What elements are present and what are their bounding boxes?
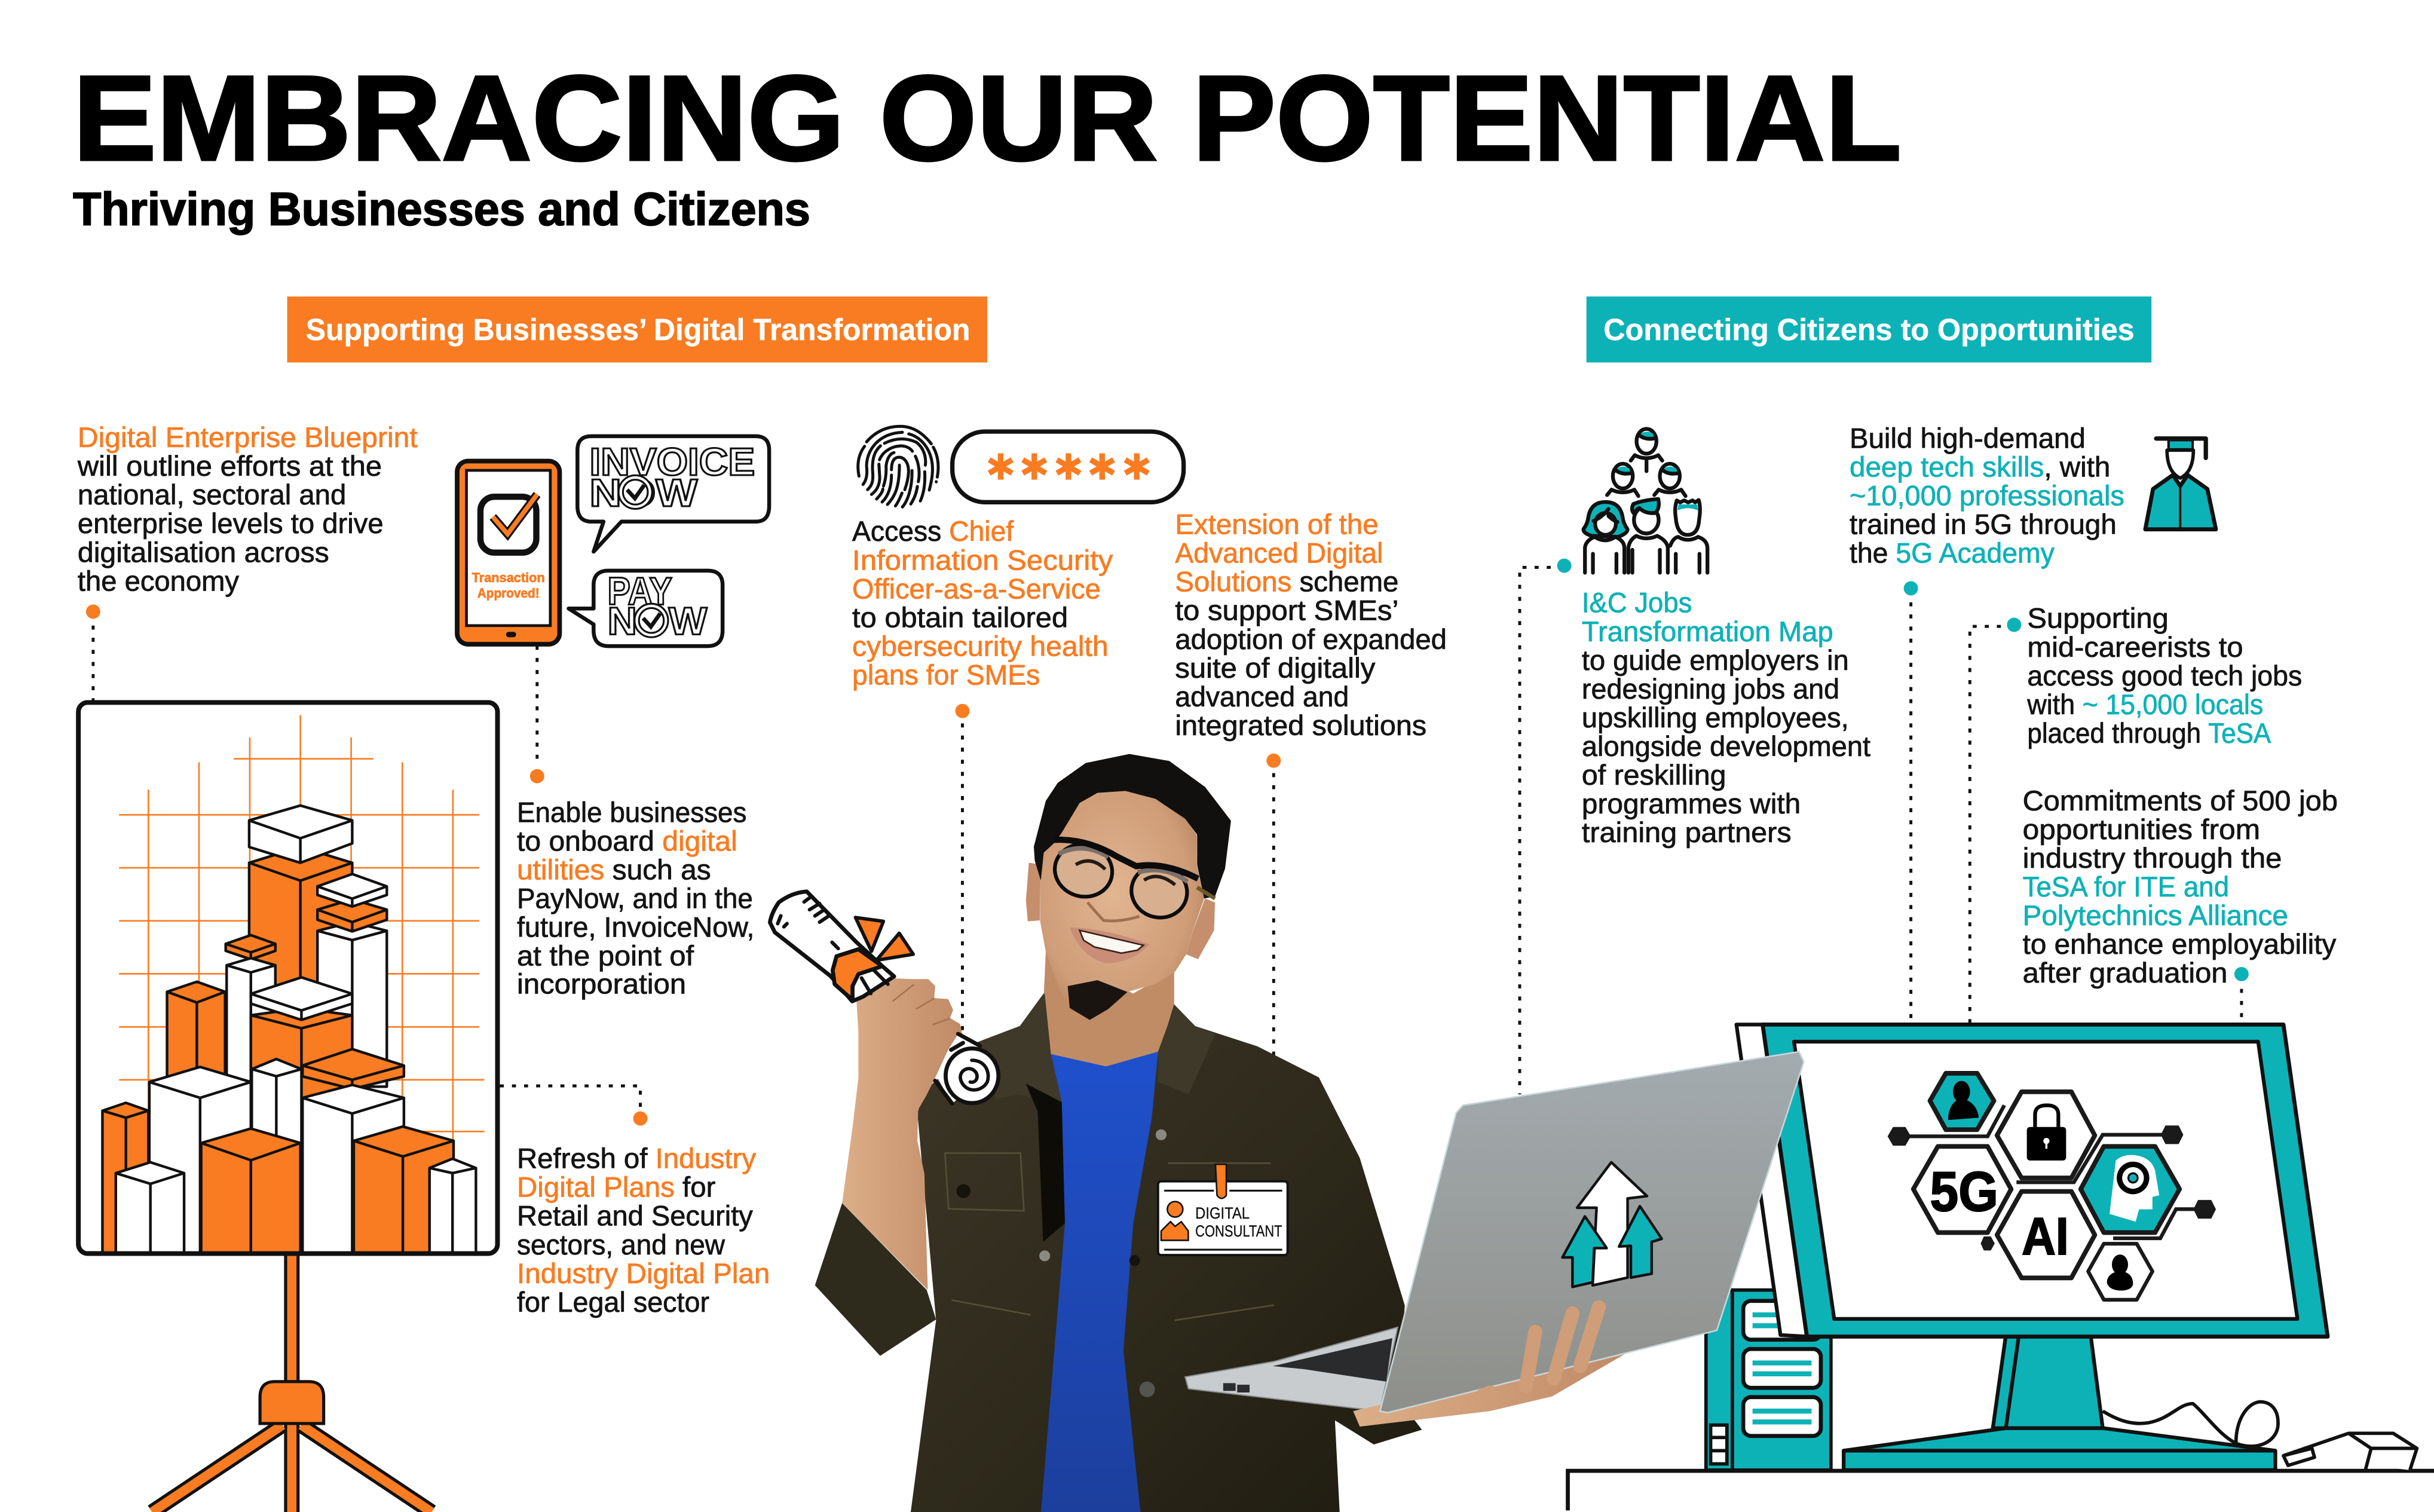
nodes <box>1888 1125 2216 1250</box>
text: advanced digital solutions: Advanced Digital <box>1175 538 1383 570</box>
text: advanced digital solutions: adoption of expanded <box>1175 624 1447 656</box>
laptop arrows logo <box>1562 1162 1662 1287</box>
text: advanced digital solutions: to support SMEs’ <box>1175 595 1398 627</box>
connector: jobs map <box>1520 559 1572 1094</box>
icon: cable and plug <box>2103 1402 2417 1470</box>
easel tripod <box>152 1254 431 1512</box>
text: digital utilities: incorporation <box>517 968 686 1000</box>
text: deep tech skills: deep tech skills, with <box>1850 451 2110 483</box>
text: deep tech skills: ~10,000 professionals <box>1850 480 2124 512</box>
icon: invoice now speech bubble: NOW <box>590 471 698 515</box>
AI hexagon: AI <box>2022 1207 2069 1266</box>
text: jobs transformation map: to guide employers in <box>1582 645 1849 677</box>
icon: monitor stand <box>1844 1335 2276 1470</box>
photo: man in jacket with laptop <box>770 754 1804 1512</box>
text: chief information security officer: cybersecurity health <box>852 630 1109 662</box>
title: EMBRACING OUR POTENTIAL <box>73 51 1902 186</box>
icon: paynow speech bubble: PAY <box>608 569 672 613</box>
text: digital enterprise blueprint: national, sectoral and <box>78 479 346 511</box>
orange grid <box>119 715 484 1180</box>
laptop lid <box>1380 1052 1804 1413</box>
text: tesa alliance: opportunities from <box>2023 814 2260 846</box>
text: mid-careerists: with ~ 15,000 locals <box>2026 689 2263 721</box>
connector: cybersecurity <box>956 704 969 1032</box>
text: industry digital plans: Retail and Security <box>517 1201 753 1232</box>
text: tesa alliance: Polytechnics Alliance <box>2023 900 2288 932</box>
text: jobs transformation map: of reskilling <box>1582 760 1726 791</box>
section heading: supporting businesses <box>287 296 987 363</box>
nose shadow <box>1088 902 1140 921</box>
text: industry digital plans: Digital Plans for <box>517 1172 716 1204</box>
connector lines <box>1900 1105 2205 1238</box>
collar shadow <box>1025 1084 1065 1242</box>
text: digital enterprise blueprint: digitalisation across <box>78 537 329 568</box>
neck <box>1044 951 1174 1067</box>
text: deep tech skills: the 5G Academy <box>1850 538 2055 570</box>
head hexagon <box>2081 1146 2179 1232</box>
text: advanced digital solutions: Extension of the <box>1175 509 1379 541</box>
text: digital utilities: Enable businesses <box>517 797 746 828</box>
text: deep tech skills: Build high-demand <box>1850 423 2086 454</box>
icon: people group <box>1584 429 1707 573</box>
text: jobs transformation map: upskilling employees, <box>1582 702 1849 734</box>
text: mid-careerists: access good tech jobs <box>2027 660 2302 692</box>
text: digital enterprise blueprint: enterprise levels to drive <box>78 508 384 540</box>
connector: blueprint to chart <box>86 604 100 702</box>
fingers over lid <box>1483 1307 1599 1395</box>
text: digital enterprise blueprint: Digital Enterprise Blueprint <box>78 422 418 454</box>
text: industry digital plans: Refresh of Industry <box>517 1143 756 1175</box>
forearm and fist <box>842 978 962 1290</box>
lock hexagon <box>1997 1092 2095 1178</box>
text: mid-careerists <box>2026 603 2302 749</box>
text: chief information security officer <box>852 516 1113 691</box>
ribbon bow <box>856 917 913 960</box>
text: digital enterprise blueprint <box>77 422 418 597</box>
icon: invoice now speech bubble: INVOICE <box>590 440 755 483</box>
section heading: supporting businesses: Supporting Businesses’ Digital Transformation <box>306 313 970 347</box>
eyes <box>1076 861 1175 885</box>
connector: phone to digital utilities <box>530 646 544 783</box>
text: advanced digital solutions: advanced and <box>1175 681 1349 713</box>
text: jobs transformation map: Transformation Map <box>1582 616 1833 648</box>
jacket pockets and buttons <box>945 1130 1274 1397</box>
text: advanced digital solutions: Solutions scheme <box>1175 567 1398 598</box>
text: digital utilities: utilities such as <box>517 855 711 886</box>
connector: digital solutions <box>1266 754 1281 1063</box>
text: tesa alliance: after graduation <box>2023 957 2228 989</box>
text: tesa alliance: TeSA for ITE and <box>2023 871 2229 903</box>
text: mid-careerists: mid-careerists to <box>2027 632 2243 663</box>
icon: password field <box>953 431 1184 502</box>
text: digital utilities <box>517 797 754 1000</box>
text: tesa alliance <box>2023 785 2338 989</box>
icon: graduate <box>2145 439 2216 529</box>
hair <box>1034 754 1231 898</box>
ears <box>1026 862 1215 959</box>
text: jobs transformation map <box>1582 587 1870 849</box>
text: jobs transformation map: redesigning jobs and <box>1582 674 1839 705</box>
hand under laptop <box>1353 1340 1631 1427</box>
section heading: connecting citizens <box>1587 296 2151 363</box>
name badge: DIGITAL <box>1195 1204 1250 1222</box>
text: tesa alliance: industry through the <box>2023 843 2282 874</box>
text: digital utilities: to onboard digital <box>517 825 737 857</box>
text: advanced digital solutions: suite of digitally <box>1175 653 1376 684</box>
teal person hexagon <box>1930 1073 1994 1130</box>
text: chief information security officer: Information Security <box>852 544 1113 576</box>
roll end <box>936 1034 981 1104</box>
connector: 5g academy <box>1904 581 1918 1024</box>
text: digital utilities: at the point of <box>517 941 694 972</box>
text: industry digital plans: for Legal sector <box>517 1287 709 1318</box>
icon: transaction phone <box>457 461 559 644</box>
face <box>1040 791 1204 1020</box>
5G hexagon: 5G <box>1930 1160 1998 1223</box>
connector: chart to industry digital plans <box>500 1086 647 1125</box>
text: chief information security officer: Access Chief <box>852 516 1014 547</box>
icon: paynow speech bubble: NOW <box>608 599 708 643</box>
text: jobs transformation map: alongside development <box>1582 731 1870 763</box>
text: mid-careerists: placed through TeSA <box>2027 718 2271 749</box>
desk <box>1568 1471 2434 1510</box>
text: chief information security officer: plans for SMEs <box>852 660 1040 691</box>
finger creases <box>893 984 950 1024</box>
icon: monitor <box>1737 1024 2328 1336</box>
text: digital enterprise blueprint: will outline efforts at the <box>77 451 382 482</box>
blue shirt <box>1041 1052 1158 1512</box>
AI hexagon <box>1997 1192 2095 1278</box>
icon: city chart on easel <box>78 702 498 1512</box>
check badge <box>480 494 537 553</box>
jacket body <box>911 992 1422 1512</box>
chart frame <box>78 702 498 1254</box>
icon: invoice now speech bubble <box>577 436 769 552</box>
name badge <box>1158 1164 1288 1255</box>
text: deep tech skills <box>1850 423 2124 570</box>
scroll tube <box>770 892 894 1001</box>
section heading: connecting citizens: Connecting Citizens to Opportunities <box>1603 313 2135 347</box>
5G hexagon <box>1913 1146 2011 1232</box>
text: deep tech skills: trained in 5G through <box>1850 509 2117 541</box>
jacket sleeve <box>815 1203 936 1356</box>
text: chief information security officer: to obtain tailored <box>852 602 1068 633</box>
icon: hexagon network <box>1888 1073 2216 1300</box>
text: advanced digital solutions: integrated solutions <box>1175 710 1426 742</box>
text: digital utilities: future, InvoiceNow, <box>517 912 754 944</box>
buildings <box>102 806 476 1253</box>
icon: paynow speech bubble <box>568 569 722 646</box>
text: jobs transformation map: I&C Jobs <box>1582 587 1692 619</box>
icon: rolled scroll <box>770 892 999 1104</box>
icon: transaction phone: Transaction <box>472 570 545 585</box>
text: industry digital plans: sectors, and new <box>517 1229 725 1261</box>
icon: transaction phone: Approved! <box>477 586 540 601</box>
text: industry digital plans: Industry Digital Plan <box>517 1258 770 1290</box>
name badge: CONSULTANT <box>1195 1222 1282 1240</box>
text: chief information security officer: Officer-as-a-Service <box>852 573 1101 605</box>
text: advanced digital solutions <box>1175 509 1447 742</box>
smile <box>1070 928 1149 963</box>
text: industry digital plans <box>517 1143 770 1318</box>
icon: fingerprint <box>858 426 938 507</box>
connector: tesa alliance <box>2234 967 2249 1024</box>
laptop base <box>1185 1327 1398 1411</box>
text: digital enterprise blueprint: the economy <box>78 565 239 597</box>
text: tesa alliance: to enhance employability <box>2023 929 2337 960</box>
jacket collar <box>978 993 1216 1102</box>
goatee <box>1068 980 1128 1020</box>
subtitle: Thriving Businesses and Citizens <box>73 183 810 235</box>
text: mid-careerists: Supporting <box>2027 603 2169 635</box>
teeth <box>1080 931 1143 953</box>
text: jobs transformation map: programmes with <box>1582 788 1801 820</box>
text: digital utilities: PayNow, and in the <box>517 883 753 915</box>
text: jobs transformation map: training partners <box>1582 817 1792 849</box>
icon: computer tower <box>1706 1290 1831 1470</box>
person hexagon <box>2088 1244 2153 1300</box>
connector: tesa locals <box>1970 618 2021 1024</box>
glasses <box>1049 838 1215 924</box>
text: tesa alliance: Commitments of 500 job <box>2023 785 2338 817</box>
